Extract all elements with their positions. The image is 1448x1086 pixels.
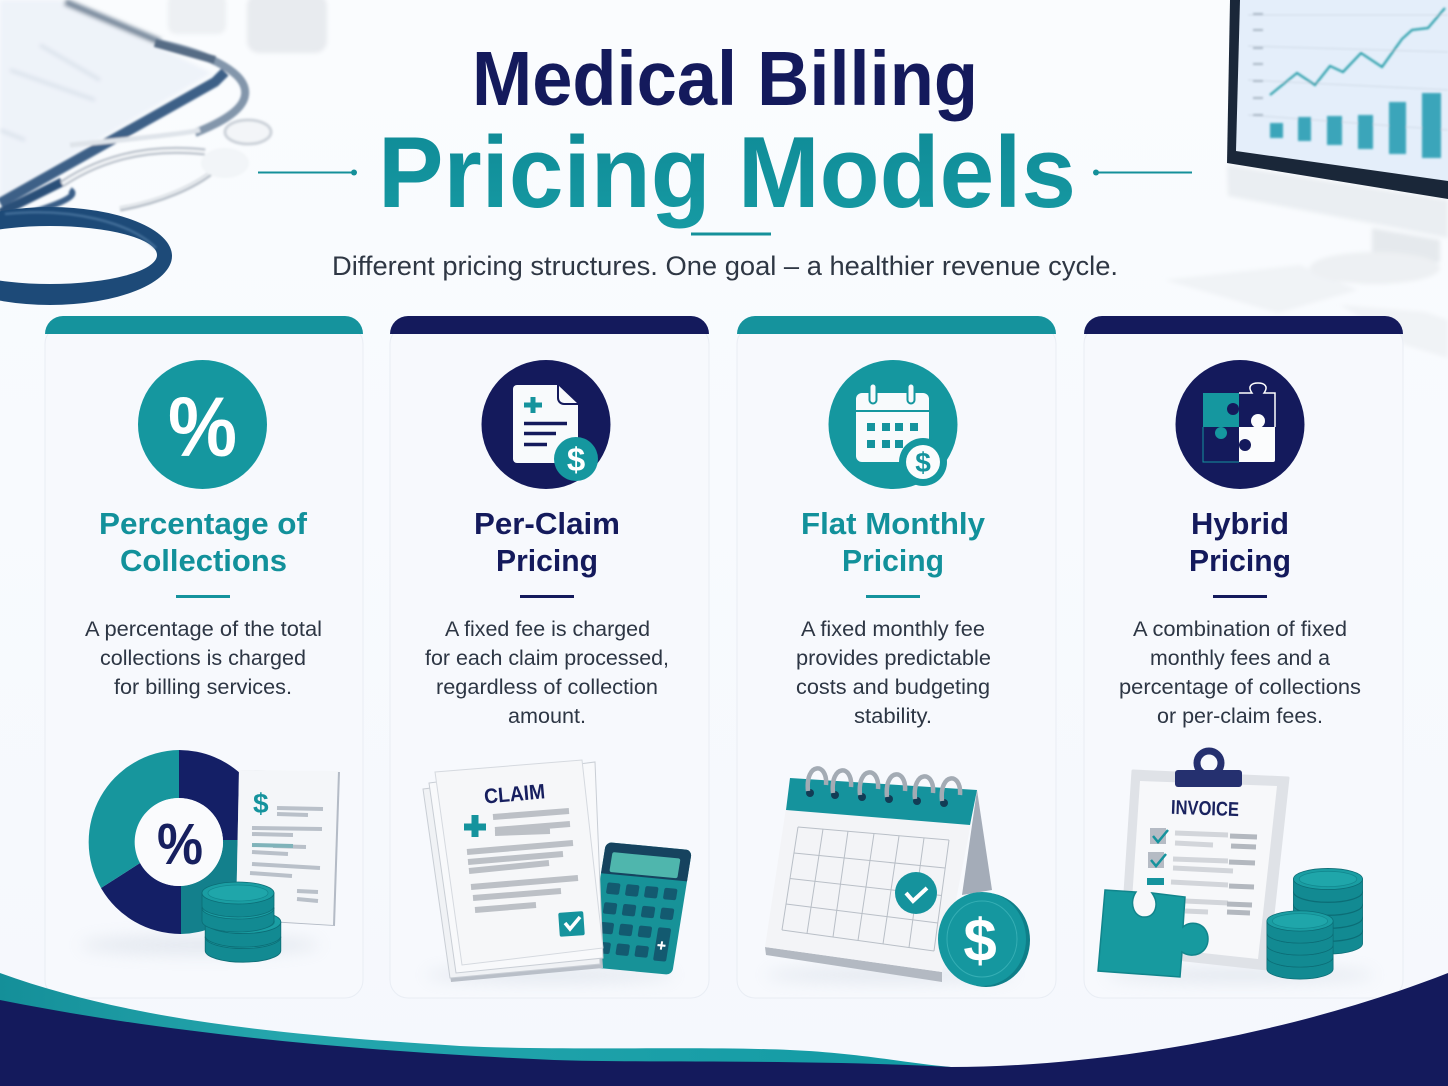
description [425,617,669,728]
background photo: stethoscope and clipboard [0,0,327,305]
description: for billing services. [114,675,292,699]
card top bar [390,316,709,334]
heading [474,506,620,578]
heading: Flat Monthly [801,506,986,541]
description: monthly fees and a [1150,646,1330,670]
document [236,770,340,926]
heading [801,506,986,578]
illustration: donut chart, document and coins [80,750,340,962]
description: costs and budgeting [796,675,990,699]
heading divider [176,595,230,598]
icon: claim document: $ [567,441,585,478]
check badge [895,872,937,914]
icon: claim document [482,360,610,489]
panel: per-claim pricing [390,316,709,998]
description: A fixed fee is charged [445,617,650,641]
clipboard: INVOICE [1171,797,1239,821]
icon: percent: % [168,380,237,474]
claim papers [423,760,603,982]
title underline [691,232,771,236]
card top bar [45,316,363,334]
binder rings [806,768,960,807]
calendar header [786,778,977,825]
heading: Pricing [842,543,944,578]
back coin stack [1293,868,1363,954]
illustration: claim papers and calculator [423,760,692,983]
card top bar [737,316,1056,334]
panel: hybrid pricing [1084,316,1403,998]
heading: Per-Claim [474,506,620,541]
description: collections is charged [100,646,306,670]
document: $ [253,788,269,819]
heading: Percentage of [99,506,308,541]
description: percentage of collections [1119,675,1361,699]
illustration: invoice clipboard, puzzle piece and coins [1098,751,1375,983]
description: A combination of fixed [1133,617,1347,641]
donut chart [89,750,271,934]
left title rule [258,170,357,176]
card top bar [1084,316,1403,334]
icon: percent [138,360,267,489]
description: provides predictable [796,646,991,670]
description [85,617,322,699]
panel: flat monthly pricing [737,316,1056,998]
panel: percentage of collections [45,316,363,998]
heading divider [1213,595,1267,598]
front coin stack [1267,911,1333,979]
description: A percentage of the total [85,617,322,641]
puzzle piece [1098,890,1208,977]
title [378,36,1076,229]
description [1119,617,1361,728]
subtitle: Different pricing structures. One goal – a healthier revenue cycle. [332,251,1118,281]
heading [99,506,308,578]
dollar coin [938,892,1030,987]
calculator [586,842,692,975]
description: stability. [854,704,932,728]
illustration: desk calendar and dollar coin [765,768,1030,987]
heading: Pricing [496,543,598,578]
description: amount. [508,704,586,728]
title line 2: Pricing Models [378,117,1076,229]
icon: calendar with dollar: $ [915,447,931,478]
description: for each claim processed, [425,646,669,670]
description [796,617,991,728]
claim papers: CLAIM [483,780,546,809]
dollar coin: $ [963,907,997,974]
clip [1175,751,1242,787]
title line 1: Medical Billing [472,36,978,122]
heading: Collections [120,543,287,578]
donut chart: % [157,812,203,877]
heading divider [866,595,920,598]
description: A fixed monthly fee [801,617,985,641]
icon: calendar with dollar [828,360,958,489]
clipboard [1121,751,1288,969]
right title rule [1093,170,1192,176]
description: or per-claim fees. [1157,704,1323,728]
calendar page [765,808,971,982]
heading [1189,506,1291,578]
description: regardless of collection [436,675,658,699]
coin stack [202,882,281,962]
calendar stand [962,790,992,895]
icon: puzzle [1176,360,1304,489]
bottom wave [0,973,1448,1086]
heading: Hybrid [1191,506,1289,541]
background photo: monitor and keyboard [1165,0,1448,358]
heading divider [520,595,574,598]
heading: Pricing [1189,543,1291,578]
